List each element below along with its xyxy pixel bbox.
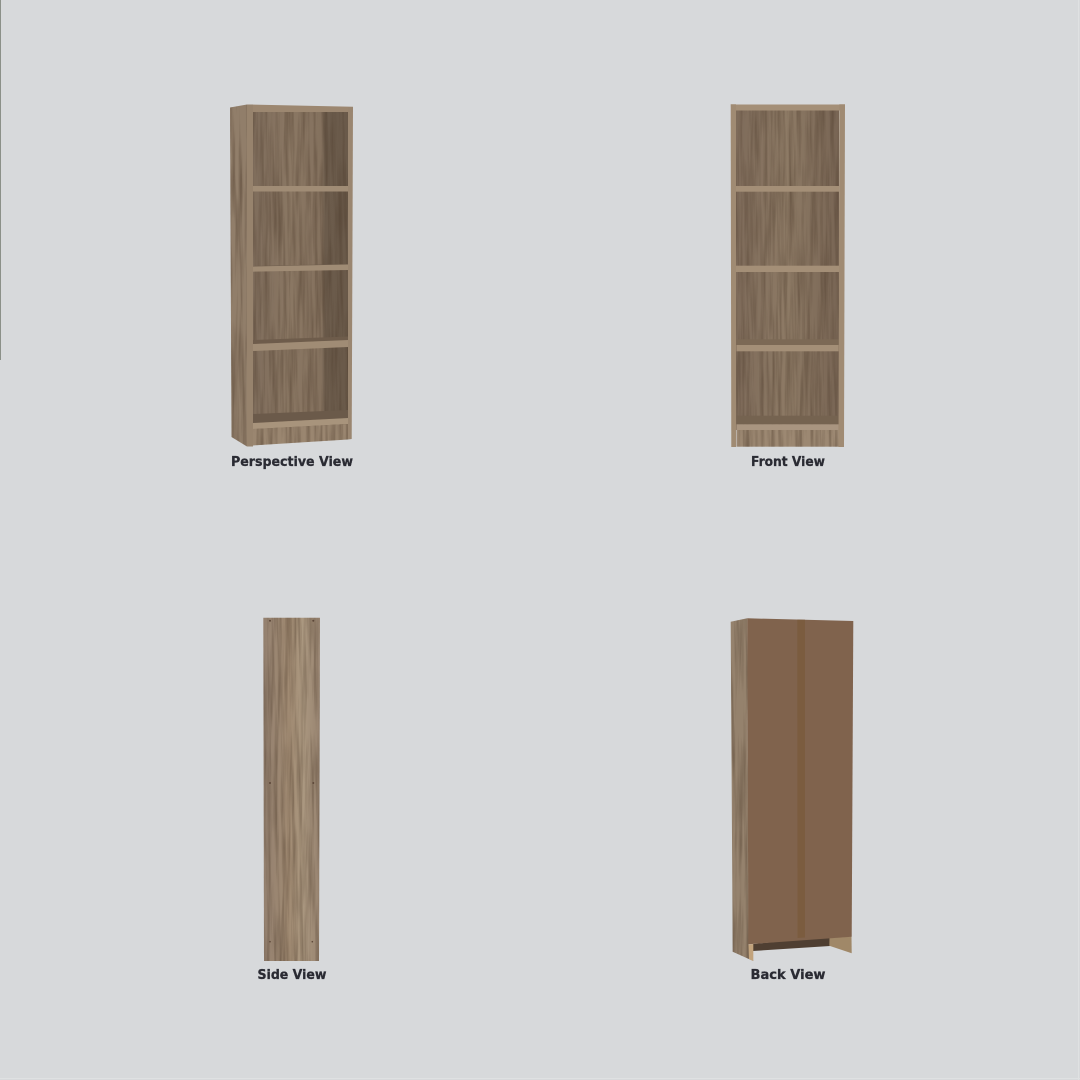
bookcase: perspective view [230,104,353,446]
label: perspective view: Perspective View [231,455,353,470]
bookcase: back view [731,618,853,961]
back panel [736,110,839,430]
hardboard back panel [747,618,853,944]
right foot [829,936,852,953]
shelf 3 [736,339,838,351]
left foot edge [748,944,753,961]
bookcase: side view [263,618,320,961]
back panel [253,112,348,430]
bottom edge line [0,1078,1080,1079]
label: side view: Side View [258,968,326,983]
shelf 2 [736,266,839,272]
screw holes [269,620,314,942]
side panel [731,618,753,961]
centre tape strip [797,620,805,938]
bottom shelf and plinth [253,410,348,446]
bottom shelf and plinth [736,416,838,447]
recess under the back panel [753,937,830,951]
left edge line [0,0,1,360]
side panel [263,618,320,961]
front frame [247,104,353,446]
shelf 1 [736,186,839,192]
label: front view: Front View [751,455,825,470]
shelf 1 [253,186,348,192]
bookcase: front view [731,104,845,447]
frame [731,104,845,447]
side panel [230,104,247,446]
shelf 2 [253,264,348,272]
label: back view: Back View [750,968,826,983]
shelf 3 [253,336,348,351]
right edge line [1078,0,1079,1080]
